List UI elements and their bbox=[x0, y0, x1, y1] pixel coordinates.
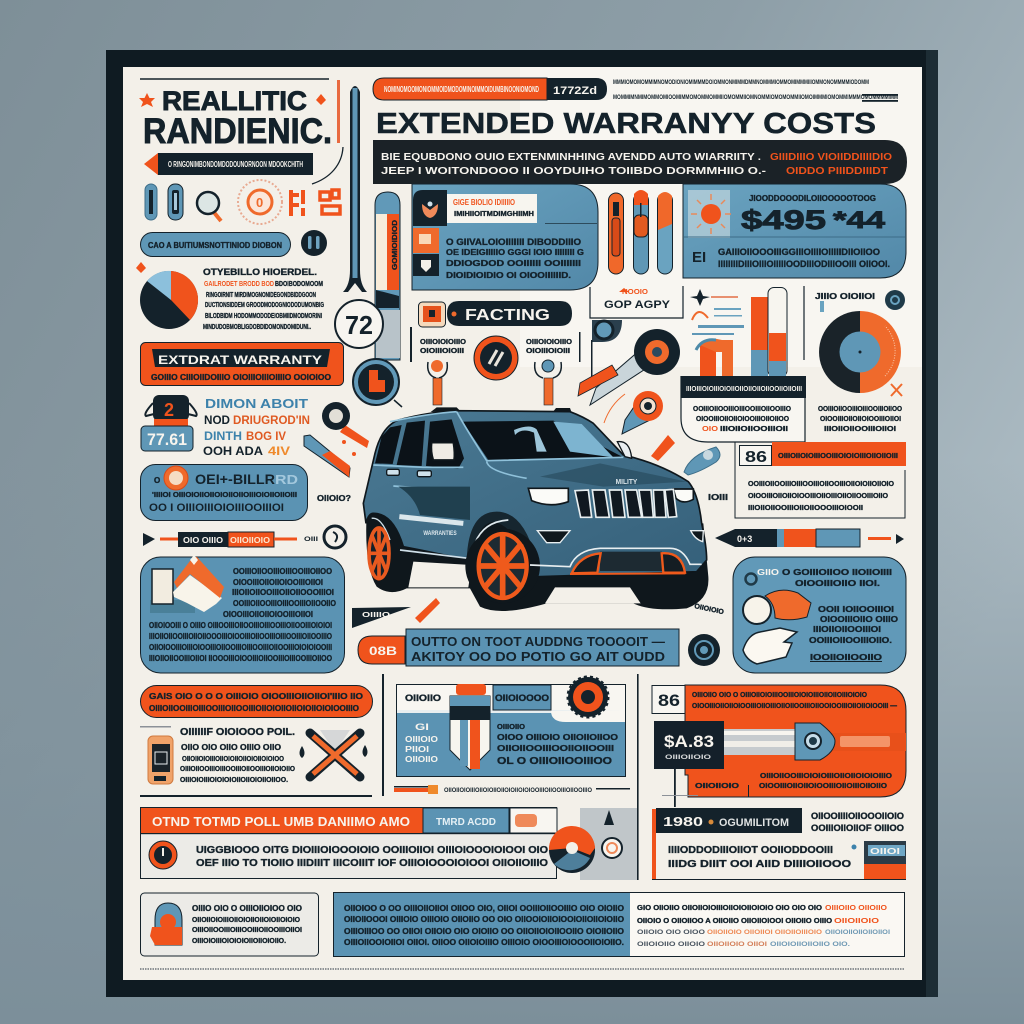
icon: lower hand bbox=[743, 628, 797, 664]
panel: chart caption: OOIIIOIIOOIIIOIIIOOIIIOIIOOIIIO bbox=[693, 406, 792, 413]
icon: upper hand bbox=[743, 590, 811, 624]
icon: jersey 2: 77.61 bbox=[147, 430, 187, 449]
panel: price card: GAIIIOIIOOOIIIGGIIIOIIIIOIIIIIDIIOIIOO bbox=[718, 247, 880, 257]
progress bar: OIII bbox=[304, 537, 318, 543]
mini legend bbox=[690, 289, 744, 335]
panel: service pill: O bbox=[154, 476, 160, 485]
callout: center message: AKITOY OO DO POTIO GO AIT OUDD bbox=[411, 649, 665, 664]
panel: right hands card: O GOIIIOIIOO IIOIIOIIII bbox=[782, 568, 892, 577]
panel: handshake card bbox=[140, 555, 344, 673]
icon: diamond bbox=[316, 94, 326, 105]
panel: orange wrench card: OIIIOIIOOIIIOIOIOIIIOIIOIIOIOIOIIIO bbox=[760, 773, 893, 780]
panel: bottom note pair: OIIOIOIIO OIIOIO bbox=[637, 941, 705, 948]
panel: orange note and tips: OIIIOIIOOIIIOIIIOOIIIOIIOOIIIOIIOIOIIO bbox=[180, 766, 296, 773]
fog lights bbox=[537, 531, 703, 543]
panel: coverage card: OE IDEIGIIIIIO GGGI IOIO IIIIIIII G bbox=[446, 248, 584, 257]
panel: right hands card: OIOOIIIOIIO IIOI. bbox=[795, 579, 880, 588]
box: age note bbox=[590, 286, 683, 318]
small label: OIIOIO? bbox=[317, 494, 351, 503]
text block: color lines: OOH ADA bbox=[203, 444, 263, 458]
text block: color lines bbox=[203, 396, 310, 458]
panel: orange note and tips: OIIIOIIOOIIIOIIIOOIIIOIIOOIIIOIIOIOIIOIIOIOIIOIOIOOIIIO bbox=[149, 704, 359, 713]
windows bbox=[375, 419, 623, 468]
panel: orange header table bbox=[140, 808, 557, 878]
panel: shield info: OL O OIIIOIIOOIIIOO bbox=[497, 756, 612, 767]
badge: number 72 bbox=[335, 300, 383, 348]
panel: warning note: IIIOIIOIIOOIIIOIIOIIOOOIIIOIOOII bbox=[748, 505, 863, 512]
icon: shield bbox=[450, 684, 490, 770]
orange banner: extended warranty bbox=[140, 342, 344, 386]
donut chart: IIIOIIOIIOOIIIOIIOI bbox=[824, 426, 896, 433]
panel: orange wrench card: OIIOIIOIO bbox=[695, 783, 740, 790]
panel: bottom note pair: OIIOIOIIOIIOIIOIIOI bbox=[825, 929, 890, 936]
panel: handshake card: OIOOIIIOIIOIIOIOOIIIOIIOI bbox=[223, 610, 313, 619]
panel: dark label block bbox=[652, 808, 906, 880]
text block: color lines: DINTH bbox=[204, 429, 242, 443]
wrench shaft bbox=[723, 723, 906, 760]
icon: jersey 2: 2 bbox=[164, 400, 174, 420]
panel: warning note: 86 bbox=[745, 449, 767, 466]
panel: bottom left note: OIIIOIOIIIOIOIOIOIIOIIOIOIIO. bbox=[192, 938, 286, 945]
panel: right hands card: IIIOIIOIIOOIIIOI bbox=[813, 625, 881, 634]
small accent strokes bbox=[604, 394, 625, 423]
heading pill: factoring: FACTING bbox=[465, 307, 550, 324]
icon: spiral bbox=[688, 634, 720, 666]
vertical pill gauge bbox=[375, 192, 400, 360]
header pill bbox=[373, 78, 607, 100]
panel: orange note and tips: OIIOIIOIOIIIOIIOIOIIOIIOIOIIOIOIOO bbox=[182, 756, 284, 763]
panel: bottom note pair: OIIOIOIIOIIOIIO OIO. bbox=[770, 941, 850, 948]
pennant label: OIIIIO bbox=[362, 612, 391, 619]
connector bbox=[662, 769, 698, 807]
icon: star bbox=[139, 93, 155, 107]
panel: bottom note pair: OIIIOIIOOIOIIOI OIIOI. OIIOO OIIOIOIIIO OIIIOIO OIOOIIIOIOOOIIOIOIIO. bbox=[344, 938, 624, 947]
card tag bbox=[864, 841, 906, 879]
panel: shield info: OIIIOIIO bbox=[497, 724, 526, 731]
poster frame bbox=[106, 50, 938, 997]
panel: service pill: 'IIIIOI OIIIOIOIIOIIOIOIIOIIOIIIOIOIIOIIOIII bbox=[152, 492, 297, 499]
panel: service pill: RD bbox=[275, 472, 298, 487]
panel: service pill: OO I OIIIOIIIOIOIIIOOIIIOI bbox=[149, 502, 284, 514]
panel: handshake card: OIIOIOOIII O OIIIO OIIIOOIIIOIIOOIIIOIIIOOIIIOIIOOIIIOIOIOI bbox=[149, 621, 332, 630]
callout: price tag: 08B bbox=[369, 644, 397, 658]
text block: pie notes: MINDUDOBMOBLIGDOBDIDOMONDOMIDUNI.. bbox=[203, 324, 311, 331]
text block: factoring right: OIOIIIOIOIII bbox=[526, 348, 570, 355]
callout: price tag bbox=[358, 636, 405, 664]
divider bbox=[382, 674, 384, 796]
header pill: 1772Zd bbox=[553, 85, 597, 97]
panel: handshake card: OOIIIOIIOOIIIOIIIOOIIIOIIOO bbox=[233, 567, 332, 576]
panel: shield info: OIIOIIO bbox=[405, 693, 441, 703]
panel: bottom note pair: OIIOIIOIO bbox=[834, 918, 880, 925]
panel: warning note: OOIIIOIIOOIIIOIIIOOIIIOIIOOIIIOIIOIOIIOIIOIO bbox=[748, 481, 895, 488]
panel: shield info: PIIOI bbox=[405, 745, 429, 754]
small diamond bbox=[136, 262, 146, 273]
panel: dark label block: IIIIODDODIIIOIIOT OOIIODDOOIII bbox=[668, 845, 833, 856]
card text: O GIIVALOIOIIIIIII DIBODDIIIO bbox=[446, 237, 581, 247]
text block: color lines: BOG IV bbox=[246, 429, 286, 443]
shield footer strip: OIIOIIOIOIIIOIIOIOIIOIIOIOIIOIOIOOIIIOIIOOIIIOIIOOIIIO bbox=[444, 788, 592, 794]
donut chart: OIOOIIIOIIOIIOIOOIIIOIIOI bbox=[820, 416, 901, 423]
icon: round orange magnifier badge bbox=[353, 359, 402, 407]
divider bbox=[637, 674, 639, 880]
panel: handshake card: OIOOIIIOIIOIIOIOOIIIOIIOI bbox=[233, 578, 323, 587]
callout: center message: OUTTO ON TOOT AUDDNG TOOOOIT — bbox=[411, 634, 665, 649]
card tag: OIIOI bbox=[870, 847, 900, 856]
text block: pie notes: OTYEBILLO HIOERDEL. bbox=[203, 267, 317, 277]
icon: orange gear target: 0 bbox=[256, 195, 263, 210]
panel: right hands card bbox=[733, 557, 906, 673]
panel: bottom left note: OIIIO OIO O OIIIOIIOIOO OIO bbox=[192, 904, 302, 913]
vertical tube bbox=[343, 86, 367, 292]
callout: center message bbox=[406, 629, 679, 666]
lower bumper bbox=[530, 548, 702, 574]
headlights bbox=[528, 488, 693, 505]
icon: black pause circle bbox=[301, 230, 327, 256]
panel: bottom left note bbox=[140, 893, 318, 956]
panel: chart caption: OIO bbox=[702, 426, 719, 433]
icon: jersey 2 bbox=[141, 395, 197, 451]
curved decorative pointer bbox=[312, 147, 343, 184]
icon: small blade bbox=[684, 447, 720, 475]
front wheel bbox=[465, 529, 540, 603]
icon: gear bbox=[568, 677, 608, 717]
pencil bar bbox=[715, 529, 904, 547]
panel: chart caption: OIOOIIIOIIOIIOIOOIIIOIIOIIOO bbox=[696, 416, 790, 423]
icon: sun bbox=[688, 190, 731, 238]
text block: pie notes: BDOIBODOMOOM bbox=[275, 281, 323, 288]
price figures: $495 bbox=[741, 205, 826, 235]
heading pill: factoring bbox=[418, 301, 572, 327]
icon: orange chip bbox=[651, 435, 675, 461]
icon: disc bbox=[549, 808, 637, 880]
panel: right hands card: IOOIIOIIOOIIO bbox=[810, 653, 882, 662]
text block: factoring right: OIIIOIOIOIIIO bbox=[526, 339, 573, 346]
far mirror bbox=[617, 442, 632, 458]
icon: large key wrench bbox=[578, 329, 680, 405]
progress bar: OIIOIIOIO bbox=[230, 536, 270, 545]
panel: top left brand bbox=[139, 79, 332, 175]
icon: helmet figure bbox=[150, 903, 182, 945]
text block: factoring left: OIOIIIOIOIII bbox=[420, 348, 464, 355]
panel: shield info: OIIIOIO bbox=[405, 735, 438, 744]
panel: chart caption: IIIOIIIOIOIIIOIOIIOIIOIIOIIOIIOOIIOIIOIII bbox=[686, 386, 802, 393]
text block: pie notes: RINGOIRNIT MIRDIMOGNONIDEGONDBIDDGOON bbox=[206, 292, 316, 299]
icon: small circle bbox=[885, 290, 905, 310]
panel: price card bbox=[683, 184, 906, 278]
icon: ring bbox=[324, 526, 346, 548]
icon: ring in grey panel bbox=[602, 838, 622, 858]
panel: bottom note pair: OIIIOIIO OIIOIIO bbox=[825, 905, 888, 912]
icon: orange coin bbox=[164, 466, 188, 490]
panel: bottom note pair: OIIOIIOIO OIIOI bbox=[707, 941, 767, 948]
icon: drop in grey panel bbox=[604, 810, 614, 825]
windshield reflection bbox=[514, 422, 613, 457]
jeep badge: MILITY bbox=[616, 477, 637, 486]
number box: 86 bbox=[658, 691, 680, 710]
panel: bottom left note: OIIOIIOIOIIIOIIOIOIIOIIOIOIIOIOIO bbox=[192, 917, 301, 924]
panel: right hands card: OIOOIIIOIIO OIIIO bbox=[820, 615, 898, 624]
panel: orange note and tips: GAIS OIO O O O OIIIOIO OIOOIIIOIIOIIOI'IIIO IIO bbox=[149, 692, 363, 701]
dial behind key bbox=[592, 320, 622, 342]
text block: color lines: NOD bbox=[204, 413, 230, 427]
icon row bbox=[145, 180, 340, 224]
panel: dark label block: IIIDG DIIIT OOI AIID DIIIIOIIOOO bbox=[668, 859, 851, 870]
text block: pie notes bbox=[203, 267, 324, 331]
main title: EXTENDED WARRANYY COSTS bbox=[376, 108, 876, 140]
panel: bottom note pair: GIO OIIOIIO OIIOIIOIOIIIOIIOIOIIOIOIO OIO OIO OIO bbox=[637, 905, 823, 912]
text block: top right strip bbox=[613, 80, 898, 102]
brand title line one: REALLITIC bbox=[162, 86, 307, 116]
text block: factoring left bbox=[410, 327, 467, 362]
panel: service pill bbox=[140, 464, 308, 520]
panel: bottom note pair: OIIOIO OIO OIOO bbox=[637, 929, 705, 936]
icon: fuel phone bbox=[148, 736, 173, 784]
subtitle banner: GIIIDIIIO VIOIIDDIIIIDIO bbox=[770, 152, 892, 163]
text block: color lines: 4IV bbox=[268, 444, 290, 458]
icon: left wrench bbox=[322, 402, 369, 448]
pennant label bbox=[352, 607, 411, 628]
box: age note: NOOIO bbox=[622, 289, 649, 296]
panel: bottom note pair bbox=[334, 892, 904, 956]
icon: spiral small bbox=[746, 574, 756, 584]
panel: coverage card bbox=[412, 184, 598, 290]
price badge: $A.83 bbox=[664, 732, 714, 751]
panel: dark label block: 1980 bbox=[663, 814, 703, 829]
panel: chart caption: IIIOIIOIIOOIIIOII bbox=[720, 426, 788, 433]
rear wheel bbox=[369, 528, 389, 579]
icon: left bracket clamp bbox=[428, 360, 447, 405]
number box bbox=[652, 686, 685, 714]
side sill bbox=[372, 517, 508, 558]
panel: dark label block: OIIOOIIIIOIIOOOIIOIO bbox=[811, 811, 904, 821]
right car small label: OIIOIOIO bbox=[694, 603, 725, 616]
price badge bbox=[654, 721, 724, 769]
panel: shield info: OIIOIOOOO bbox=[495, 693, 549, 703]
panel: orange wrench card: OIIIOIIO OIO O OIIIOIIOIOIIIOOIIIOIOIOIIIOIIOIIOIIIOIOIO bbox=[692, 692, 868, 699]
text block: pie notes: DUCTIONSIDDEM GROODMODOGNIODODUMONBIG bbox=[205, 302, 324, 309]
panel: service pill: OEI+-BILLR bbox=[195, 471, 275, 487]
text block: factoring left: OIIIOIOIOIIIO bbox=[420, 339, 467, 346]
panel: orange note and tips: OIIO OIO OIIO OIIIO OIIO bbox=[181, 743, 281, 752]
panel: warning note bbox=[735, 442, 906, 518]
icon: timer bbox=[149, 841, 177, 869]
panel: dark label block: OGUMILITOM bbox=[719, 817, 789, 829]
panel: orange header table: UIGGBIOOO OITG DIOIIIOIOOOIOIO OOIIIOIIOI OIIIOIOOOIOIOOI OIO bbox=[196, 845, 548, 856]
pencil bar: 0+3 bbox=[737, 534, 752, 544]
icon: magnifier bbox=[197, 192, 221, 221]
door handles bbox=[387, 469, 431, 477]
icon: three vertical gauges bbox=[608, 190, 672, 274]
progress bar: OIO OIIIO bbox=[183, 536, 223, 545]
wheel arch bbox=[467, 512, 535, 567]
panel: right hands card: GIIO bbox=[757, 568, 779, 577]
panel: bottom note pair: OIIOIO O OIIOIIOO A OIIOIIO OIIOIIOIOOI OIIOIIO OIIIO bbox=[637, 918, 833, 925]
illustration: SUV bbox=[363, 407, 708, 611]
arrow banner bbox=[144, 153, 313, 175]
panel: price card: *44 bbox=[833, 207, 886, 234]
panel: warning note: OIIIOIIOIOIIIOOIIIOIOIOIIIOIIOIIOIII bbox=[778, 453, 898, 460]
orange banner: extended warranty: GOIIIO CIIIOIIDOIIIO OIOIIIOIIIOIIIIO OOIOIOO bbox=[151, 373, 331, 382]
donut chart: JIIIO OIOIIOI bbox=[815, 292, 875, 301]
panel: orange wrench card: OIOOIIIOIIOIIOIOOIIIOIIOIIIOIIOIIO bbox=[759, 783, 888, 790]
car body bbox=[363, 411, 707, 577]
panel: right hands card: OOIIIOIIOOIIIOIIO. bbox=[809, 636, 892, 645]
door badge: WARRANTIES bbox=[423, 531, 457, 537]
icon: orange tag bbox=[413, 228, 439, 253]
icon: angled tool bbox=[304, 435, 350, 477]
footer dotted rule bbox=[140, 968, 905, 970]
bar chart bbox=[696, 288, 787, 377]
text block: factoring right bbox=[526, 332, 592, 380]
icon: orange glyphs bbox=[291, 190, 340, 216]
panel: handshake card: IIIOIIOIIOOIIIOIIOIIOOOIIIOI bbox=[232, 588, 334, 597]
white note bbox=[447, 194, 537, 223]
panel: orange header table: TMRD ACDD bbox=[436, 817, 496, 828]
subtitle banner: OIDDO PIIIDDIIIDT bbox=[786, 166, 888, 177]
donut chart bbox=[804, 286, 905, 433]
subtitle banner: JEEP I WOITONDOOO II OOYDUIHO TOIIBDO DORMMHIIO O.- bbox=[381, 166, 766, 177]
white note: IMIHIIOITMDIMGHIIMH bbox=[454, 211, 534, 218]
roof rails bbox=[431, 407, 572, 413]
panel: coverage card: DIOIDIOIDIO OI OIOOIIIIIID. bbox=[446, 271, 571, 280]
panel: price card: IIIIIIIIDIIIOIIIOIIIIIOODIIIODIIIOOIII OIIOOI. bbox=[718, 259, 890, 269]
subtitle banner: BIE EQUBDONO OUIO EXTENMINHHING AVENDD AUTO WIARRIITY . bbox=[381, 152, 761, 163]
hood lines bbox=[373, 412, 623, 492]
shield footer strip bbox=[394, 785, 630, 794]
icon: black heart block bbox=[413, 254, 439, 276]
panel: handshake card: OIIOIOOIIIOIIIOIOOIIIOIIOOIIIOIIIOOIIIOIIOOIIIOIOIOIOOIII bbox=[149, 643, 332, 652]
panel: orange wrench card bbox=[652, 685, 906, 797]
icon: orange gear target bbox=[238, 180, 282, 224]
panel: coverage card: DDIOGDOD OOIIIIII OOIIIIIII bbox=[446, 259, 581, 268]
icon: orange stick bbox=[415, 598, 440, 623]
text block: pie notes: GAILRODET BRODD BOD bbox=[204, 281, 274, 288]
arrow banner: O RINGONIMBONDOMDODOUNORNOON MDOOKCHITH bbox=[168, 160, 303, 169]
icon: black shield block bbox=[413, 190, 447, 226]
panel: shield info bbox=[396, 684, 626, 776]
card icon: EI bbox=[692, 249, 706, 266]
accent dots bbox=[342, 440, 356, 456]
vertical pill gauge: GOMIOIDIOD bbox=[392, 220, 399, 270]
icon: vial two bbox=[168, 184, 183, 220]
panel: orange wrench card: OIOOIIIOIIOIIOIOOIIIOIIOIIIOIIOIIOOIIIOIIOOIOOIIIOIIOIIOIOOIII — bbox=[692, 703, 897, 710]
panel: warning note: OIOOIIIOIIOIIOIOOIIIOIIOIIIOIIOIIOOIIIOIIO bbox=[748, 493, 889, 500]
panel: orange header table: OEF IIIO TO TIOIIO IIIDIIIT IIICOIIIT IOF OIIIOIOOOIOIOOI OIIOIIOIIIO bbox=[196, 858, 548, 869]
text block: top right strip: MMMIOMOMOMMIMNOMODIONIOMIMMMDOIOMMONMIMMDMMNOMMMIOMMOMIMMMIIIOMMONOMMMMIODOMM bbox=[613, 80, 869, 86]
brand title line two: RANDIENIC. bbox=[143, 112, 332, 151]
icon: right bracket clamp bbox=[535, 360, 561, 405]
white note: GIGE BIOLIO IDIIIIIO bbox=[453, 198, 515, 207]
icon: crossed tools bbox=[300, 730, 368, 777]
panel: handshake card: OOIIIOIIOOIIIOIIIOOIIIOIIOOIIO bbox=[233, 599, 336, 608]
orange rule bbox=[337, 80, 340, 143]
icon: orange dial bbox=[474, 336, 518, 380]
ground cut-outs bbox=[408, 562, 641, 603]
panel: handshake card: IIIOIIOIIOOIIIOIIOIIOOOIIIOIOOIIIOIIOOIIIOIIIOOIIIOIIOOIIIO bbox=[149, 632, 332, 641]
progress bar bbox=[143, 526, 346, 548]
panel: shield info: GI bbox=[415, 722, 429, 732]
panel: bottom note pair: OIIOIOO O OO OIIIOIIOIIOI OIIOO OIO, OIIOI OOIIIOIIOOIIIO OIO OIOIIO bbox=[344, 904, 624, 913]
subtitle banner bbox=[373, 140, 907, 184]
pill: info note bbox=[140, 232, 290, 256]
box: age note: GOP AGPY bbox=[604, 299, 671, 311]
panel: orange note and tips: OIIIIIIF OIOIOOO POIL. bbox=[180, 727, 295, 738]
panel: orange header table: OTND TOTMD POLL UMB DANIIMO AMO bbox=[152, 814, 410, 829]
panel: bottom note pair: OIIOIIOIO OIIOIIOI OIIOIIOIIIOIO bbox=[707, 929, 822, 936]
badge: number 72: 72 bbox=[345, 310, 373, 340]
grille bbox=[575, 489, 677, 517]
panel: orange note and tips: OIIIOIOIIIOIOIOIOIIOIIOIOIIOIIOO. bbox=[180, 777, 288, 784]
panel: bottom note pair: OIIIOIIIOO OO OIIOI OIIOIO OIO OIOIIO OO OIIOIIOIOIIOOIIO OIOIIOIIO bbox=[344, 927, 624, 936]
donut chart: OOIIIOIIOOIIIOIIIOOIIIOIIOO bbox=[818, 406, 903, 413]
dark side panels bbox=[398, 463, 687, 520]
right car label: IOIII bbox=[708, 493, 728, 502]
header pill: NOMINOMOOMONIOMMOIDMODOMINOIMMOIDUMBINOONIOMOND bbox=[384, 85, 539, 94]
price badge: OIIIOIIOIO bbox=[665, 754, 711, 761]
panel: bottom left note: OIIIOIIOOIIIOIIIOOIIIOIIOOIIIOIIOI bbox=[192, 927, 302, 934]
text block: top right strip: MOMMIMNMIMOMMOMIOOMIMMOMOMMOMMIIOMOMMIIOMNOMMIOMOMOMMIIOMOIMMMIOMOMMIMMMOMOMMMMIMM bbox=[613, 95, 898, 101]
panel: right hands card: OOII IOIIOOIIIOI bbox=[818, 605, 894, 614]
icon: small orange wrench bbox=[622, 391, 663, 434]
panel: dark label block: OOIIIOIIOIIOF OIIIOO bbox=[811, 823, 904, 833]
icon: gloved hand bbox=[150, 555, 224, 613]
card heading: JIOODDOOODILOIIOOOOOTOOG bbox=[749, 194, 876, 203]
panel: shield info: OIIOIIOOIIIOOIIOIIOOIII bbox=[497, 744, 614, 753]
pie chart bbox=[140, 271, 198, 329]
text block: pie notes: BILODBIDM HODOMMODODEIOBMIIDMODMORINI bbox=[205, 313, 322, 320]
text block: color lines: DIMON ABOIT bbox=[205, 396, 308, 411]
pill: info note: CAO A BUITIUMSNOTTINIOD DIOBON bbox=[148, 241, 282, 250]
panel: handshake card: IIIOIIOIIOOIIIOIIOI IIOOOIIIOIOOIIIOIIOOIIIOIIIOOIIIOIIOO bbox=[149, 654, 332, 663]
orange banner: extended warranty: EXTDRAT WARRANTY bbox=[158, 353, 322, 367]
panel: chart caption bbox=[681, 376, 806, 442]
panel: shield info: OIOO OIIIOIO OIIOIIOIIOO bbox=[497, 733, 618, 742]
text block: color lines: DRIUGROD'IN bbox=[233, 413, 310, 427]
rear wheel and underbody bbox=[366, 513, 708, 611]
mirror bbox=[431, 443, 454, 460]
panel: shield info: OIIOIIO bbox=[405, 755, 438, 764]
panel: bottom note pair: OIIOIIOOOI OIIIOIO OIIIOIO OIIOIIO OO OIO OIIOOIOIIOIOOIOIIOIIOIOIIO bbox=[344, 915, 624, 924]
panel: orange note and tips bbox=[140, 686, 372, 797]
icon: vial one bbox=[145, 184, 157, 220]
